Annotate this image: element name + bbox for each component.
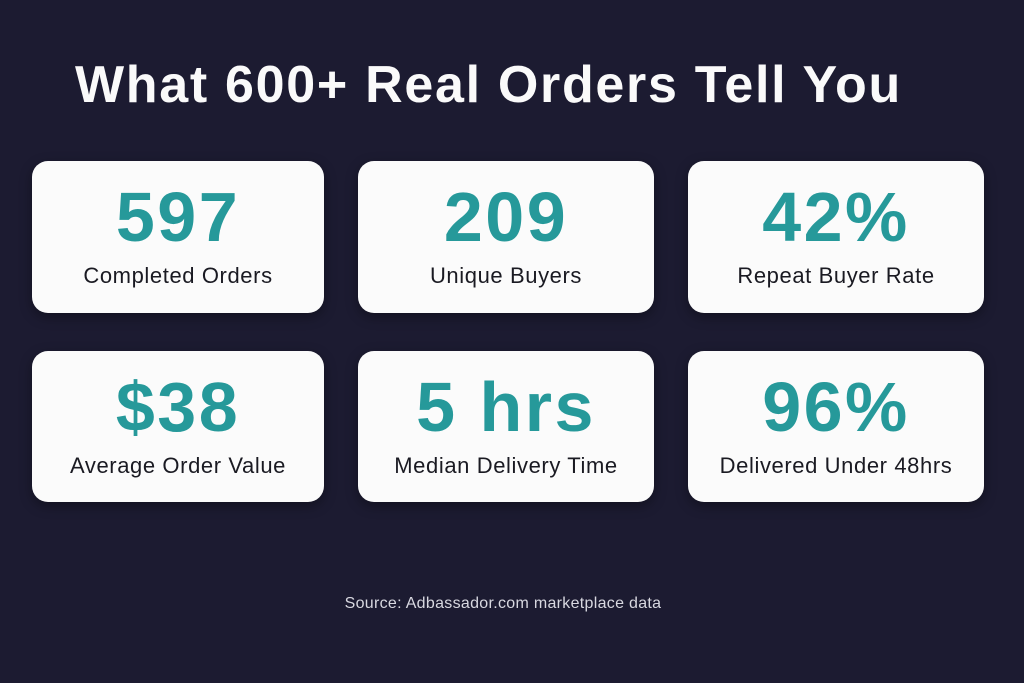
card: delivered under 48hrs (688, 351, 984, 502)
card: unique buyers: 209 (444, 178, 568, 256)
card: repeat buyer rate (688, 161, 984, 313)
title: What 600+ Real Orders Tell You (75, 56, 902, 114)
card: average order value: Average Order Value (70, 453, 286, 478)
card: unique buyers: Unique Buyers (430, 263, 582, 288)
card: completed orders: 597 (116, 178, 240, 256)
card: repeat buyer rate: 42% (762, 178, 910, 256)
card: delivered under 48hrs: Delivered Under 48hrs (720, 453, 952, 478)
card: median delivery time (358, 351, 654, 502)
card: median delivery time: 5 hrs (416, 368, 596, 446)
card: repeat buyer rate: Repeat Buyer Rate (737, 263, 935, 288)
card: average order value (32, 351, 324, 502)
card: completed orders (32, 161, 324, 313)
card: unique buyers (358, 161, 654, 313)
card: delivered under 48hrs: 96% (762, 368, 910, 446)
card: average order value: $38 (116, 368, 240, 446)
source note: Source: Adbassador.com marketplace data (345, 595, 661, 612)
card: completed orders: Completed Orders (83, 263, 273, 288)
card: median delivery time: Median Delivery Time (394, 453, 618, 478)
